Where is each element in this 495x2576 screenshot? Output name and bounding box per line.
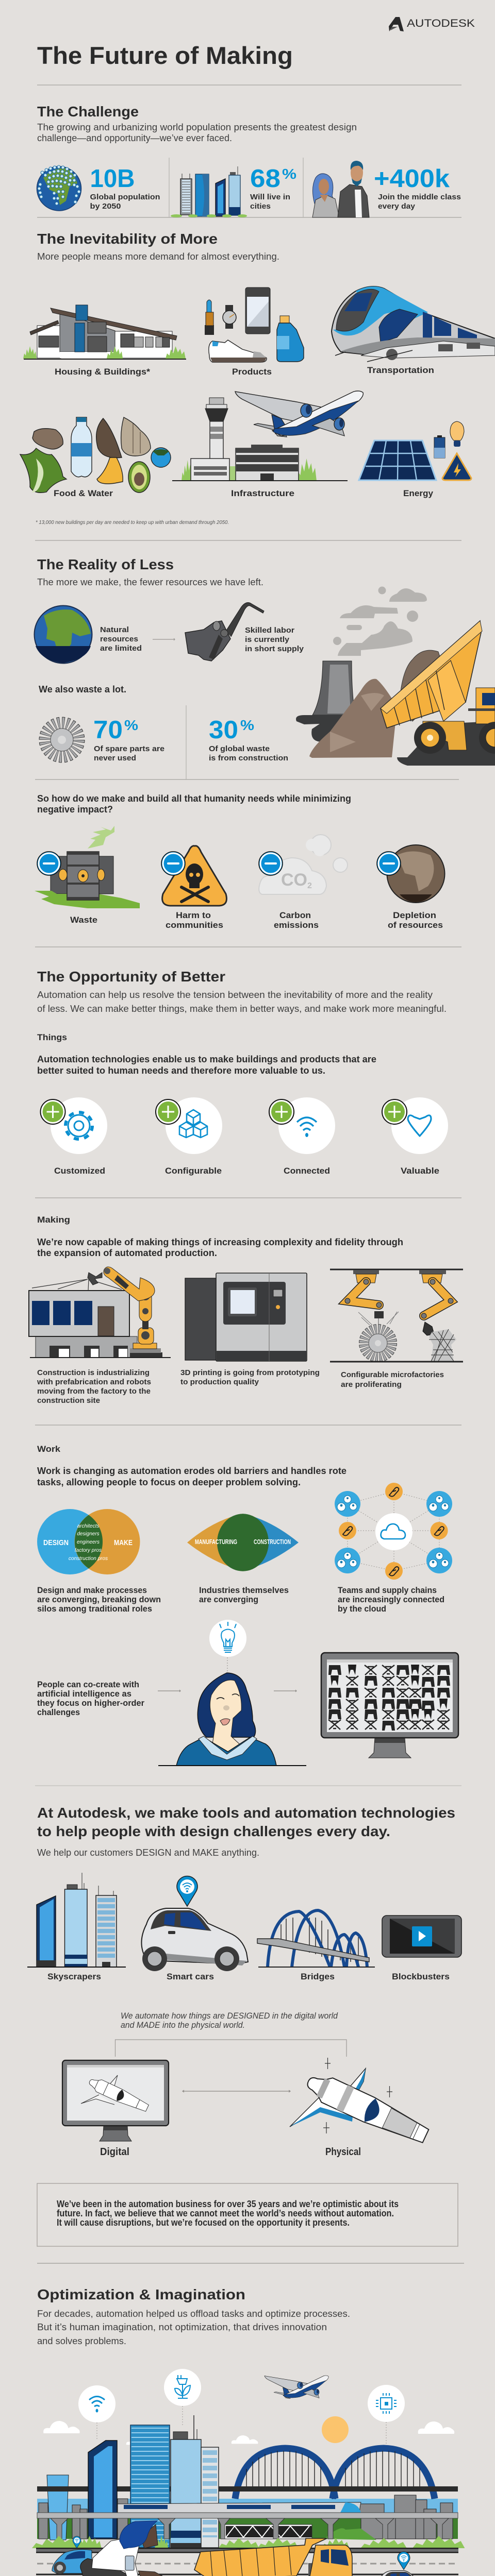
text: natural resources: are limited	[100, 644, 142, 653]
icon: globe with pins	[37, 166, 81, 211]
intro text: For decades, automation helped us offload tasks and optimize processes.	[37, 2309, 350, 2319]
panel: optimization and imagination	[32, 2286, 465, 2576]
title: The Future of Making	[37, 42, 293, 69]
icon: smoke	[333, 586, 427, 656]
heading	[37, 1805, 455, 1839]
illustration: physical spaceship	[290, 2058, 431, 2148]
stat: 68%: cities	[250, 202, 271, 211]
stat: +400k: +400k	[374, 165, 450, 193]
chart: design and make venn: factory pros	[75, 1548, 102, 1553]
things text: better suited to human needs and therefore more valuable to us.	[37, 1065, 325, 1076]
question text	[37, 793, 351, 815]
labels: Depletion	[393, 910, 436, 920]
arrow	[153, 638, 175, 640]
stat: 10B: by 2050	[90, 202, 121, 211]
label: Products	[232, 367, 272, 377]
icon: CO2 clouds	[259, 835, 348, 894]
illustration: smart car	[141, 1876, 248, 1971]
work text: tasks, allowing people to focus on deeper problem solving.	[37, 1477, 301, 1487]
heading: to help people with design challenges every day.	[37, 1823, 390, 1839]
icon: yellow dump truck	[381, 621, 495, 757]
label: Infrastructure	[231, 488, 294, 498]
text: co-create: People can co-create with	[37, 1680, 139, 1689]
stat: 30%	[209, 716, 288, 762]
panel: negative impact	[35, 793, 444, 930]
captions: Teams and supply chains	[338, 1585, 437, 1595]
work text: Work is changing as automation erodes old barriers and handles rote	[37, 1466, 346, 1476]
icon: valuable	[382, 1097, 448, 1154]
icon: high-speed train	[332, 286, 495, 362]
icon: consumer products	[205, 287, 304, 362]
illustration: small white car	[377, 2552, 439, 2576]
arrow	[274, 1690, 296, 1692]
icon: sun	[322, 2416, 349, 2443]
caption: construction: Construction is industrializing	[37, 1368, 150, 1377]
labels: Configurable	[165, 1166, 222, 1176]
icon: waste barrels	[35, 826, 140, 908]
arrow: two-way	[183, 2090, 290, 2092]
heading: The Reality of Less	[37, 556, 174, 572]
subheading: Work	[37, 1444, 61, 1454]
illustration: robot placing prefab module	[29, 1267, 171, 1358]
heading: The Inevitability of More	[37, 231, 218, 247]
labels: Connected	[284, 1166, 330, 1176]
illustration: skyscrapers	[27, 1873, 126, 1967]
label: Food & Water	[54, 488, 113, 498]
icon: two people	[312, 161, 369, 217]
captions: are converging	[199, 1595, 258, 1604]
stat: 68%: 68	[250, 165, 280, 193]
illustration: blue car	[52, 2536, 92, 2574]
italic caption: We automate how things are DESIGNED in the digital world	[121, 2011, 338, 2021]
icon: connected	[269, 1097, 335, 1154]
label: Skyscrapers	[47, 1972, 101, 1981]
labels: Waste	[70, 915, 97, 925]
panel: the opportunity of better, things	[37, 969, 448, 1176]
labels: Digital	[100, 2146, 129, 2158]
icon: airplane	[265, 2376, 328, 2399]
icon: gloved hand with welding torch	[185, 603, 264, 661]
labels	[54, 1166, 439, 1176]
caption: 3D printing: 3D printing is going from prototyping	[180, 1368, 320, 1377]
stat: +400k: Join the middle class	[378, 193, 461, 201]
illustration: digital monitor with spaceship wireframe	[62, 2060, 169, 2141]
icon: 3D printed part	[45, 723, 79, 757]
text: natural resources: resources	[100, 635, 138, 643]
label: Bridges	[301, 1972, 335, 1981]
labels	[70, 910, 443, 930]
icon: earth	[34, 606, 92, 664]
panel: making	[29, 1215, 463, 1405]
stat: 30%: 30	[209, 716, 238, 744]
intro text: We help our customers DESIGN and MAKE anything.	[37, 1848, 259, 1858]
chart: design and make venn: DESIGN	[43, 1538, 69, 1547]
icon: customized	[40, 1097, 107, 1154]
text: natural resources: Natural	[100, 625, 129, 634]
stat: 10B: Global population	[90, 193, 160, 201]
icon: earth piles	[309, 650, 449, 758]
caption: 3D printing	[180, 1368, 320, 1386]
icon: food and water	[20, 417, 171, 493]
icon: house	[23, 305, 186, 359]
labels: emissions	[274, 920, 319, 930]
chart: design and make venn: construction pros	[69, 1556, 108, 1562]
icon: energy	[359, 421, 471, 480]
icon: CO2 clouds: CO	[281, 870, 307, 890]
logo: Autodesk	[389, 17, 475, 31]
icon: wifi circle	[78, 2385, 116, 2422]
stat: +400k	[374, 165, 461, 211]
chart: converging industries: MANUFACTURING	[195, 1538, 237, 1546]
illustration: configurable microfactory	[330, 1269, 463, 1362]
icon: minus badge	[377, 852, 401, 875]
panel: at autodesk	[27, 1805, 461, 2246]
stat: 30%: Of global waste	[209, 744, 270, 753]
labels: Valuable	[401, 1166, 439, 1176]
intro text: and solves problems.	[37, 2336, 126, 2346]
labels: Physical	[325, 2146, 361, 2158]
captions: Industries themselves	[199, 1585, 289, 1595]
illustration: bridge	[257, 1910, 375, 1967]
text: natural resources	[100, 625, 142, 653]
text: co-create	[37, 1680, 144, 1717]
text: co-create: challenges	[37, 1707, 80, 1717]
intro text	[37, 122, 357, 143]
icon: oil spill and cooling tower	[296, 661, 495, 766]
labels	[100, 2146, 361, 2158]
italic caption	[121, 2011, 338, 2030]
panel: work	[37, 1444, 458, 1766]
stat: 10B: 10B	[90, 165, 135, 193]
making text: the expansion of automated production.	[37, 1248, 217, 1258]
illustration: tablet with play button	[382, 1916, 461, 1957]
label: Energy	[403, 488, 434, 498]
labels: Customized	[54, 1166, 105, 1176]
panel: the challenge	[37, 104, 461, 217]
icon: airport infrastructure	[172, 391, 363, 481]
icon: city towers	[171, 166, 247, 217]
intro text: More people means more demand for almost everything.	[37, 251, 279, 262]
illustration: monitor with generative designs	[321, 1653, 458, 1758]
icon: lightbulb	[209, 1620, 246, 1657]
icon: CO2 clouds: 2	[307, 882, 312, 890]
heading: The Opportunity of Better	[37, 969, 225, 985]
stat: 70%: Of spare parts are	[94, 744, 164, 753]
intro text: The growing and urbanizing world population presents the greatest design	[37, 122, 357, 132]
labels: Harm to	[176, 910, 211, 920]
chart: design and make venn: architects	[77, 1523, 99, 1529]
caption: 3D printing: to production quality	[180, 1378, 259, 1386]
icon: hazard triangle with skull	[162, 846, 226, 906]
intro text: But it’s human imagination, not optimization, that drives innovation	[37, 2322, 327, 2332]
things text: Automation technologies enable us to make buildings and products that are	[37, 1054, 376, 1064]
caption: construction: moving from the factory to the	[37, 1387, 151, 1396]
illustration: roadside bushes	[32, 2536, 465, 2548]
chart: cloud network	[335, 1483, 452, 1580]
intro text: challenge—and opportunity—we’ve ever faced.	[37, 133, 232, 143]
icon: depleted planet	[387, 845, 444, 903]
labels: of resources	[388, 920, 443, 930]
illustration: cyclist	[80, 2520, 163, 2576]
illustration: woman looking up	[158, 1673, 306, 1766]
heading: At Autodesk, we make tools and automation technologies	[37, 1805, 455, 1821]
callout box: We’ve been in the automation business for over 35 years and we’re optimistic about its	[57, 2199, 399, 2209]
subheading: things: Things	[37, 1032, 67, 1042]
text: skilled labor: Skilled labor	[245, 626, 294, 635]
captions: are converging, breaking down	[37, 1595, 161, 1604]
icon: minus badge	[37, 852, 61, 875]
illustration: orange dump truck	[194, 2538, 352, 2576]
labels: Carbon	[279, 910, 311, 920]
stat: +400k: every day	[378, 202, 416, 211]
label: Transportation	[367, 365, 434, 375]
subheading: We also waste a lot.	[39, 684, 126, 694]
illustration: city	[37, 2415, 458, 2548]
intro text	[37, 990, 447, 1014]
text: co-create: artificial intelligence as	[37, 1689, 131, 1699]
text: co-create: they focus on higher-order	[37, 1698, 144, 1708]
caption: microfactories	[341, 1370, 444, 1389]
heading: Optimization & Imagination	[37, 2286, 245, 2302]
icon: configurable	[156, 1097, 222, 1154]
work text	[37, 1466, 346, 1487]
text: skilled labor: in short supply	[245, 645, 304, 653]
intro text	[37, 2309, 350, 2346]
stat: 10B	[90, 165, 160, 211]
chart: design and make venn: engineers	[77, 1539, 100, 1545]
icon: minus badge	[259, 852, 283, 875]
captions: silos among traditional roles	[37, 1604, 152, 1614]
footnote: * 13,000 new buildings per day are needed to keep up with urban demand through 2050.	[36, 520, 229, 526]
stat: 70%: %	[124, 717, 138, 733]
heading: The Challenge	[37, 104, 139, 120]
panel: the inevitability of more	[20, 231, 495, 526]
label: Housing & Buildings*	[55, 367, 150, 377]
things text	[37, 1054, 376, 1076]
icons: clouds	[43, 2421, 454, 2445]
stat: 68%	[250, 165, 296, 211]
stat: 68%: Will live in	[250, 193, 290, 201]
making text	[37, 1237, 403, 1258]
intro text: of less. We can make better things, make them in better ways, and make work more meaningful.	[37, 1004, 447, 1014]
callout box: It will cause disruptions, but we’re focused on the opportunity it presents.	[57, 2217, 350, 2228]
making text: We’re now capable of making things of increasing complexity and fidelity through	[37, 1237, 403, 1247]
captions	[37, 1585, 444, 1614]
illustration: 3D printer	[185, 1273, 307, 1361]
labels: communities	[166, 920, 223, 930]
question text: So how do we make and build all that humanity needs while minimizing	[37, 793, 351, 804]
captions: Design and make processes	[37, 1585, 147, 1595]
callout box	[37, 2183, 458, 2246]
caption: microfactories: are proliferating	[341, 1380, 402, 1389]
stat: 68%: %	[282, 166, 296, 182]
captions: by the cloud	[338, 1604, 386, 1614]
connector bracket	[116, 2040, 346, 2057]
caption: construction: construction site	[37, 1396, 100, 1405]
illustration: road	[36, 2548, 458, 2576]
stat: 70%: never used	[94, 754, 136, 762]
label: Blockbusters	[392, 1972, 450, 1981]
subheading: Making	[37, 1215, 70, 1225]
caption: microfactories: Configurable microfactories	[341, 1370, 444, 1379]
stat: 70%	[93, 716, 164, 762]
question text: negative impact?	[37, 804, 113, 815]
intro text: The more we make, the fewer resources we have left.	[37, 577, 263, 587]
stat: 30%: is from construction	[209, 754, 288, 762]
logo: Autodesk: AUTODESK	[407, 18, 475, 29]
text: skilled labor: is currently	[245, 635, 290, 644]
text: skilled labor	[245, 626, 304, 653]
icon: minus badge	[161, 852, 185, 875]
chart: converging industries	[187, 1514, 299, 1571]
intro text: Automation can help us resolve the tension between the inevitability of more and the reality	[37, 990, 433, 1000]
icon: chip circle	[368, 2385, 405, 2422]
stat: 70%: 70	[93, 716, 123, 744]
callout box: future. In fact, we believe that we cannot meet the world’s needs without automation.	[57, 2208, 394, 2218]
stat: 30%: %	[240, 717, 254, 733]
chart: design and make venn: designers	[77, 1531, 100, 1537]
arrow	[158, 1690, 180, 1692]
label: Smart cars	[167, 1972, 214, 1981]
icon: plug plant circle	[164, 2369, 201, 2406]
chart: converging industries: CONSTRUCTION	[254, 1538, 291, 1546]
panel: the reality of less	[34, 556, 495, 779]
caption: construction: with prefabrication and robots	[37, 1378, 151, 1386]
italic caption: and MADE into the physical world.	[121, 2020, 245, 2030]
chart: design and make venn: MAKE	[114, 1538, 133, 1547]
caption: construction	[37, 1368, 151, 1405]
captions: are increasingly connected	[338, 1595, 444, 1604]
chart: design and make venn	[37, 1509, 140, 1574]
